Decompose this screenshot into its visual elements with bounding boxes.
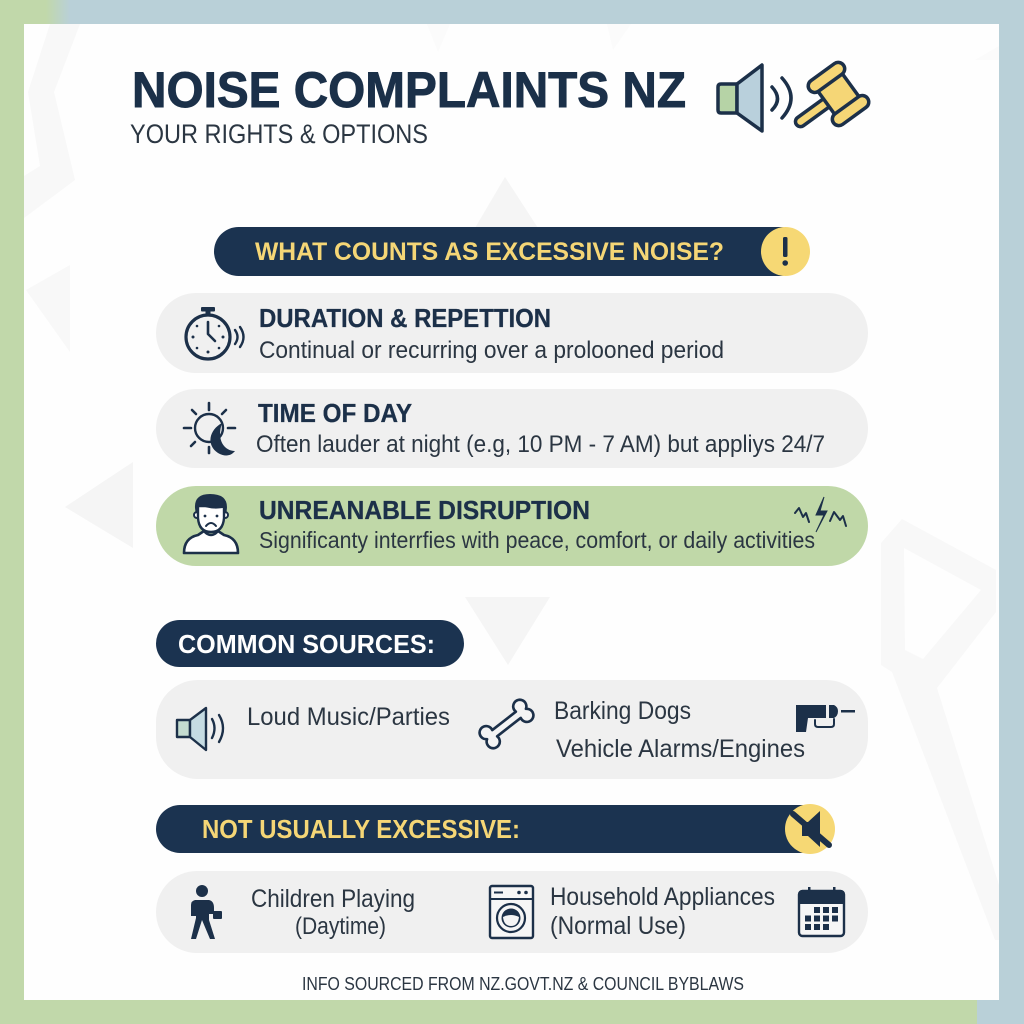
footer source note: INFO SOURCED FROM NZ.GOVT.NZ & COUNCIL BYBLAWS (302, 974, 744, 994)
icon: speaker small (177, 708, 223, 750)
card: duration and repetition: DURATION & REPETTION (259, 303, 551, 333)
card: duration and repetition (156, 293, 868, 373)
card: common sources: Loud Music/Parties (247, 703, 450, 731)
card: unreasonable disruption: Significanty interrfies with peace, comfort, or daily activities (259, 527, 815, 553)
card: not usually excessive: Household Appliances (550, 883, 775, 911)
card: time of day (156, 389, 868, 468)
icon: muted speaker (785, 804, 835, 854)
icon: gavel (781, 60, 871, 146)
title: NOISE COMPLAINTS NZ (132, 62, 686, 118)
heading: what counts as excessive noise (214, 227, 810, 276)
card: time of day: TIME OF DAY (258, 398, 412, 428)
card: not usually excessive (156, 871, 868, 953)
card: not usually excessive: Children Playing (251, 885, 415, 913)
icon: exclamation (761, 227, 810, 276)
heading: not usually excessive: NOT USUALLY EXCESSIVE: (202, 814, 520, 844)
card: unreasonable disruption: UNREANABLE DISRUPTION (259, 495, 590, 525)
icon: washing machine (490, 886, 533, 938)
card: common sources: Vehicle Alarms/Engines (556, 735, 805, 763)
card: duration and repetition: Continual or recurring over a prolooned period (259, 337, 724, 364)
icon: noise bolts (795, 497, 846, 532)
card: time of day: Often lauder at night (e.g, 10 PM - 7 AM) but appliys 24/7 (256, 431, 825, 458)
icon: power drill (796, 705, 855, 732)
icon: bone (477, 697, 536, 751)
heading: what counts as excessive noise: WHAT COUNTS AS EXCESSIVE NOISE? (255, 238, 724, 266)
card: common sources (156, 680, 868, 779)
icon: person with bag (191, 885, 222, 939)
card: common sources: Barking Dogs (554, 697, 691, 725)
icon: upset person (184, 494, 238, 553)
icon: stopwatch (186, 307, 244, 359)
icon: speaker (718, 65, 791, 131)
subtitle: YOUR RIGHTS & OPTIONS (130, 119, 428, 149)
card: not usually excessive: (Daytime) (295, 913, 386, 940)
heading: common sources: COMMON SOURCES: (178, 629, 435, 659)
heading: not usually excessive (156, 804, 835, 854)
heading: common sources (156, 620, 464, 667)
card: not usually excessive: (Normal Use) (550, 912, 686, 940)
icon: sun and moon (184, 403, 235, 455)
card: unreasonable disruption (156, 486, 868, 566)
icon: calendar (799, 887, 844, 936)
